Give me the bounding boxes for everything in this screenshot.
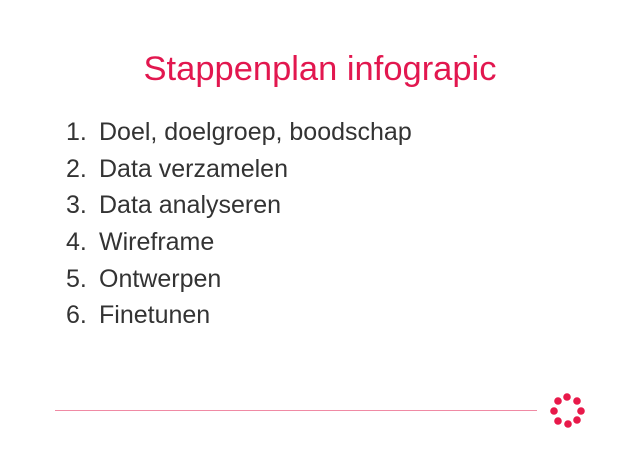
list of steps: 4. xyxy=(66,228,87,256)
list of steps: Data analyseren xyxy=(99,191,281,219)
list of steps: 6. xyxy=(66,301,87,329)
list of steps: 5. xyxy=(66,265,87,293)
list of steps xyxy=(66,118,412,329)
list of steps: 3. xyxy=(66,191,87,219)
list of steps: Ontwerpen xyxy=(99,265,221,293)
list of steps: Wireframe xyxy=(99,228,214,256)
list of steps: Finetunen xyxy=(99,301,210,329)
list of steps: Doel, doelgroep, boodschap xyxy=(99,118,412,146)
list of steps: 1. xyxy=(66,118,87,146)
footer line xyxy=(55,410,537,411)
icon: logo dots xyxy=(550,393,585,428)
title: Stappenplan infograpic xyxy=(144,50,496,88)
list of steps: Data verzamelen xyxy=(99,155,288,183)
list of steps: 2. xyxy=(66,155,87,183)
